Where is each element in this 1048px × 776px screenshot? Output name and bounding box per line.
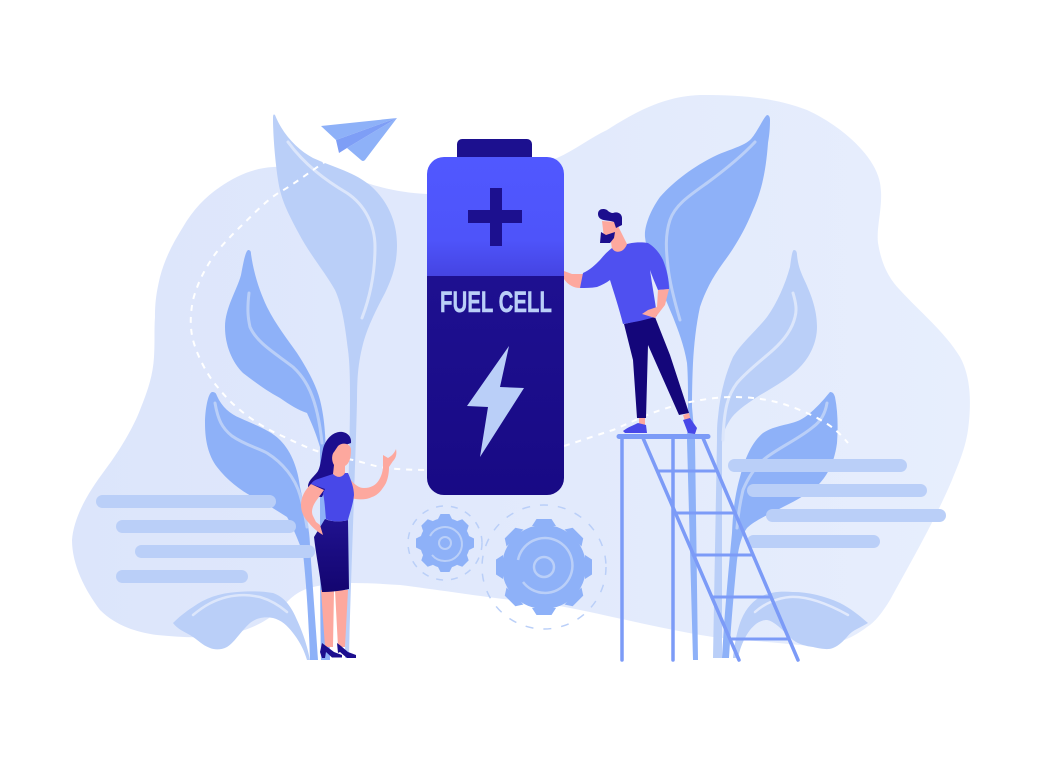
battery label: FUEL CELL — [440, 286, 552, 319]
text bars right — [728, 459, 946, 548]
leaf: mid left — [225, 250, 330, 660]
battery cap — [457, 139, 532, 163]
leaf: mid right — [713, 250, 817, 658]
leaf: low left — [205, 392, 318, 660]
ladder — [619, 436, 798, 660]
man ankles — [639, 413, 691, 426]
dashed flight path — [191, 160, 848, 470]
hair — [308, 432, 351, 497]
man pants — [624, 317, 689, 418]
battery — [427, 139, 564, 495]
gear small — [408, 506, 482, 580]
legs — [321, 590, 348, 647]
paper plane — [321, 118, 397, 161]
leaf: tall right — [645, 115, 770, 660]
leaf: bottom right — [733, 592, 868, 658]
man beard — [600, 232, 615, 243]
leaf: tall left — [273, 114, 397, 658]
man shirt — [580, 242, 669, 324]
battery lower body — [427, 276, 564, 495]
leaf: bottom left — [173, 591, 310, 660]
gear large — [482, 505, 606, 629]
text bars left — [96, 495, 315, 583]
woman — [301, 432, 396, 658]
man hand — [564, 271, 584, 288]
neck and face — [332, 444, 351, 477]
background blob — [72, 95, 970, 646]
top — [311, 473, 354, 521]
man face and neck — [602, 221, 627, 252]
leaf: low right — [722, 392, 838, 658]
right arm — [350, 449, 396, 499]
plus sign — [468, 188, 522, 246]
man forearm — [642, 289, 669, 318]
man hair — [598, 209, 622, 228]
lightning bolt — [467, 346, 524, 457]
battery upper body — [427, 157, 564, 276]
skirt — [314, 519, 349, 592]
man — [564, 209, 697, 434]
shoes — [320, 643, 356, 658]
man shoes — [623, 418, 697, 434]
left arm — [301, 484, 324, 535]
